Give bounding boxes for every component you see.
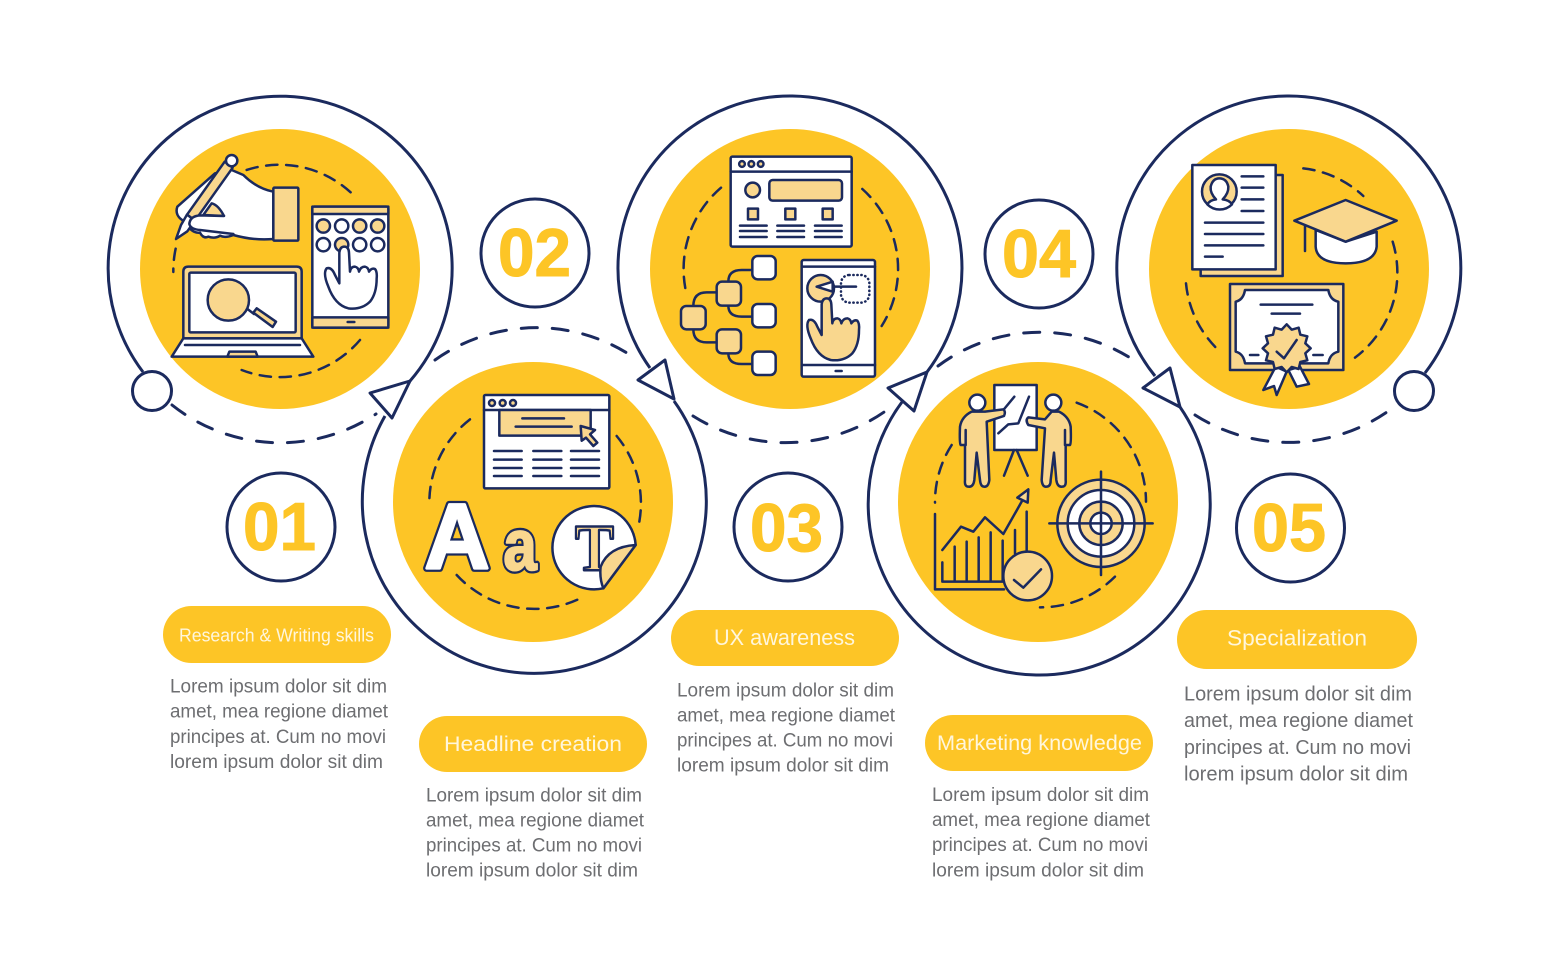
text block 1: lorem ipsum dolor sit dim	[170, 752, 383, 773]
icon: presenters, growth chart and target	[935, 385, 1153, 607]
icon: browser headline and typography: A	[424, 485, 490, 589]
text block 1: Lorem ipsum dolor sit dim	[170, 676, 387, 698]
text block 2: lorem ipsum dolor sit dim	[426, 860, 638, 882]
yellow disc 4	[898, 362, 1178, 642]
icon: browser headline and typography: A	[424, 485, 490, 589]
label pill: Research & Writing skills	[163, 606, 391, 663]
text block 2	[426, 786, 645, 882]
text block 4	[932, 785, 1151, 882]
label pill: Specialization	[1177, 610, 1417, 669]
text block 3: amet, mea regione diamet	[677, 706, 896, 726]
label pill: UX awareness: UX awareness	[714, 625, 855, 650]
label pill: Marketing knowledge: Marketing knowledge	[937, 732, 1142, 755]
label pill: Research & Writing skills: Research & Writing skills	[179, 626, 374, 646]
text block 1	[170, 676, 389, 773]
icon: browser headline and typography: T	[575, 513, 614, 586]
icon: wireframe, flow chart and phone	[681, 157, 898, 377]
text block 5	[1184, 684, 1413, 786]
text block 2: amet, mea regione diamet	[426, 810, 645, 832]
text block 5: principes at. Cum no movi	[1184, 737, 1411, 759]
text block 1: principes at. Cum no movi	[170, 727, 386, 748]
yellow disc 3	[650, 129, 930, 409]
panel: step 2 headline creation	[362, 199, 706, 882]
label pill: Headline creation	[419, 716, 647, 772]
icon: resume, graduation cap and diploma	[1186, 165, 1397, 395]
label pill: Headline creation: Headline creation	[444, 733, 622, 756]
number badge 02: 02	[498, 215, 571, 291]
text block 2: Lorem ipsum dolor sit dim	[426, 786, 642, 806]
text block 1: amet, mea regione diamet	[170, 702, 389, 722]
ring 3 with arrow	[618, 96, 962, 443]
panel: step 3 UX awareness	[618, 96, 962, 776]
panel: step 1 research and writing skills	[108, 96, 452, 773]
text block 4: Lorem ipsum dolor sit dim	[932, 785, 1149, 806]
number badge 05	[1236, 474, 1344, 582]
panel: step 5 specialization	[1117, 96, 1461, 786]
text block 3: principes at. Cum no movi	[677, 730, 893, 752]
ring 4 with arrow	[868, 332, 1210, 675]
text block 4: principes at. Cum no movi	[932, 835, 1148, 856]
icon: browser headline and typography: a	[503, 507, 537, 586]
text block 5: amet, mea regione diamet	[1184, 710, 1413, 732]
yellow disc 1	[140, 129, 420, 409]
text block 2: principes at. Cum no movi	[426, 836, 642, 856]
ring 5 with end node	[1117, 96, 1461, 442]
icon: browser headline and typography: a	[503, 507, 537, 586]
number badge 01	[227, 473, 335, 581]
label pill: Specialization: Specialization	[1227, 626, 1367, 650]
text block 5: Lorem ipsum dolor sit dim	[1184, 684, 1412, 706]
number badge 03	[734, 473, 842, 581]
text block 3: lorem ipsum dolor sit dim	[677, 756, 889, 776]
text block 3: Lorem ipsum dolor sit dim	[677, 680, 894, 702]
number badge 04	[985, 200, 1093, 308]
ring 2 with arrow	[362, 328, 706, 673]
text block 5: lorem ipsum dolor sit dim	[1184, 764, 1408, 786]
label pill: Marketing knowledge	[925, 715, 1153, 771]
number badge 01: 01	[243, 489, 316, 565]
panel: step 4 marketing knowledge	[868, 200, 1210, 882]
yellow disc 5	[1149, 129, 1429, 409]
icon: browser headline and typography	[424, 395, 641, 609]
text block 4: amet, mea regione diamet	[932, 810, 1151, 831]
number badge 02	[481, 199, 589, 307]
text block 4: lorem ipsum dolor sit dim	[932, 860, 1144, 882]
yellow disc 2	[393, 362, 673, 642]
text block 3	[677, 680, 896, 776]
number badge 04: 04	[1002, 216, 1076, 292]
icon: writing hand, tablet and laptop search	[172, 155, 388, 377]
number badge 03: 03	[750, 490, 823, 566]
number badge 05: 05	[1252, 490, 1326, 566]
label pill: UX awareness	[671, 610, 899, 666]
ring 1 with start node and arrow	[108, 96, 452, 443]
